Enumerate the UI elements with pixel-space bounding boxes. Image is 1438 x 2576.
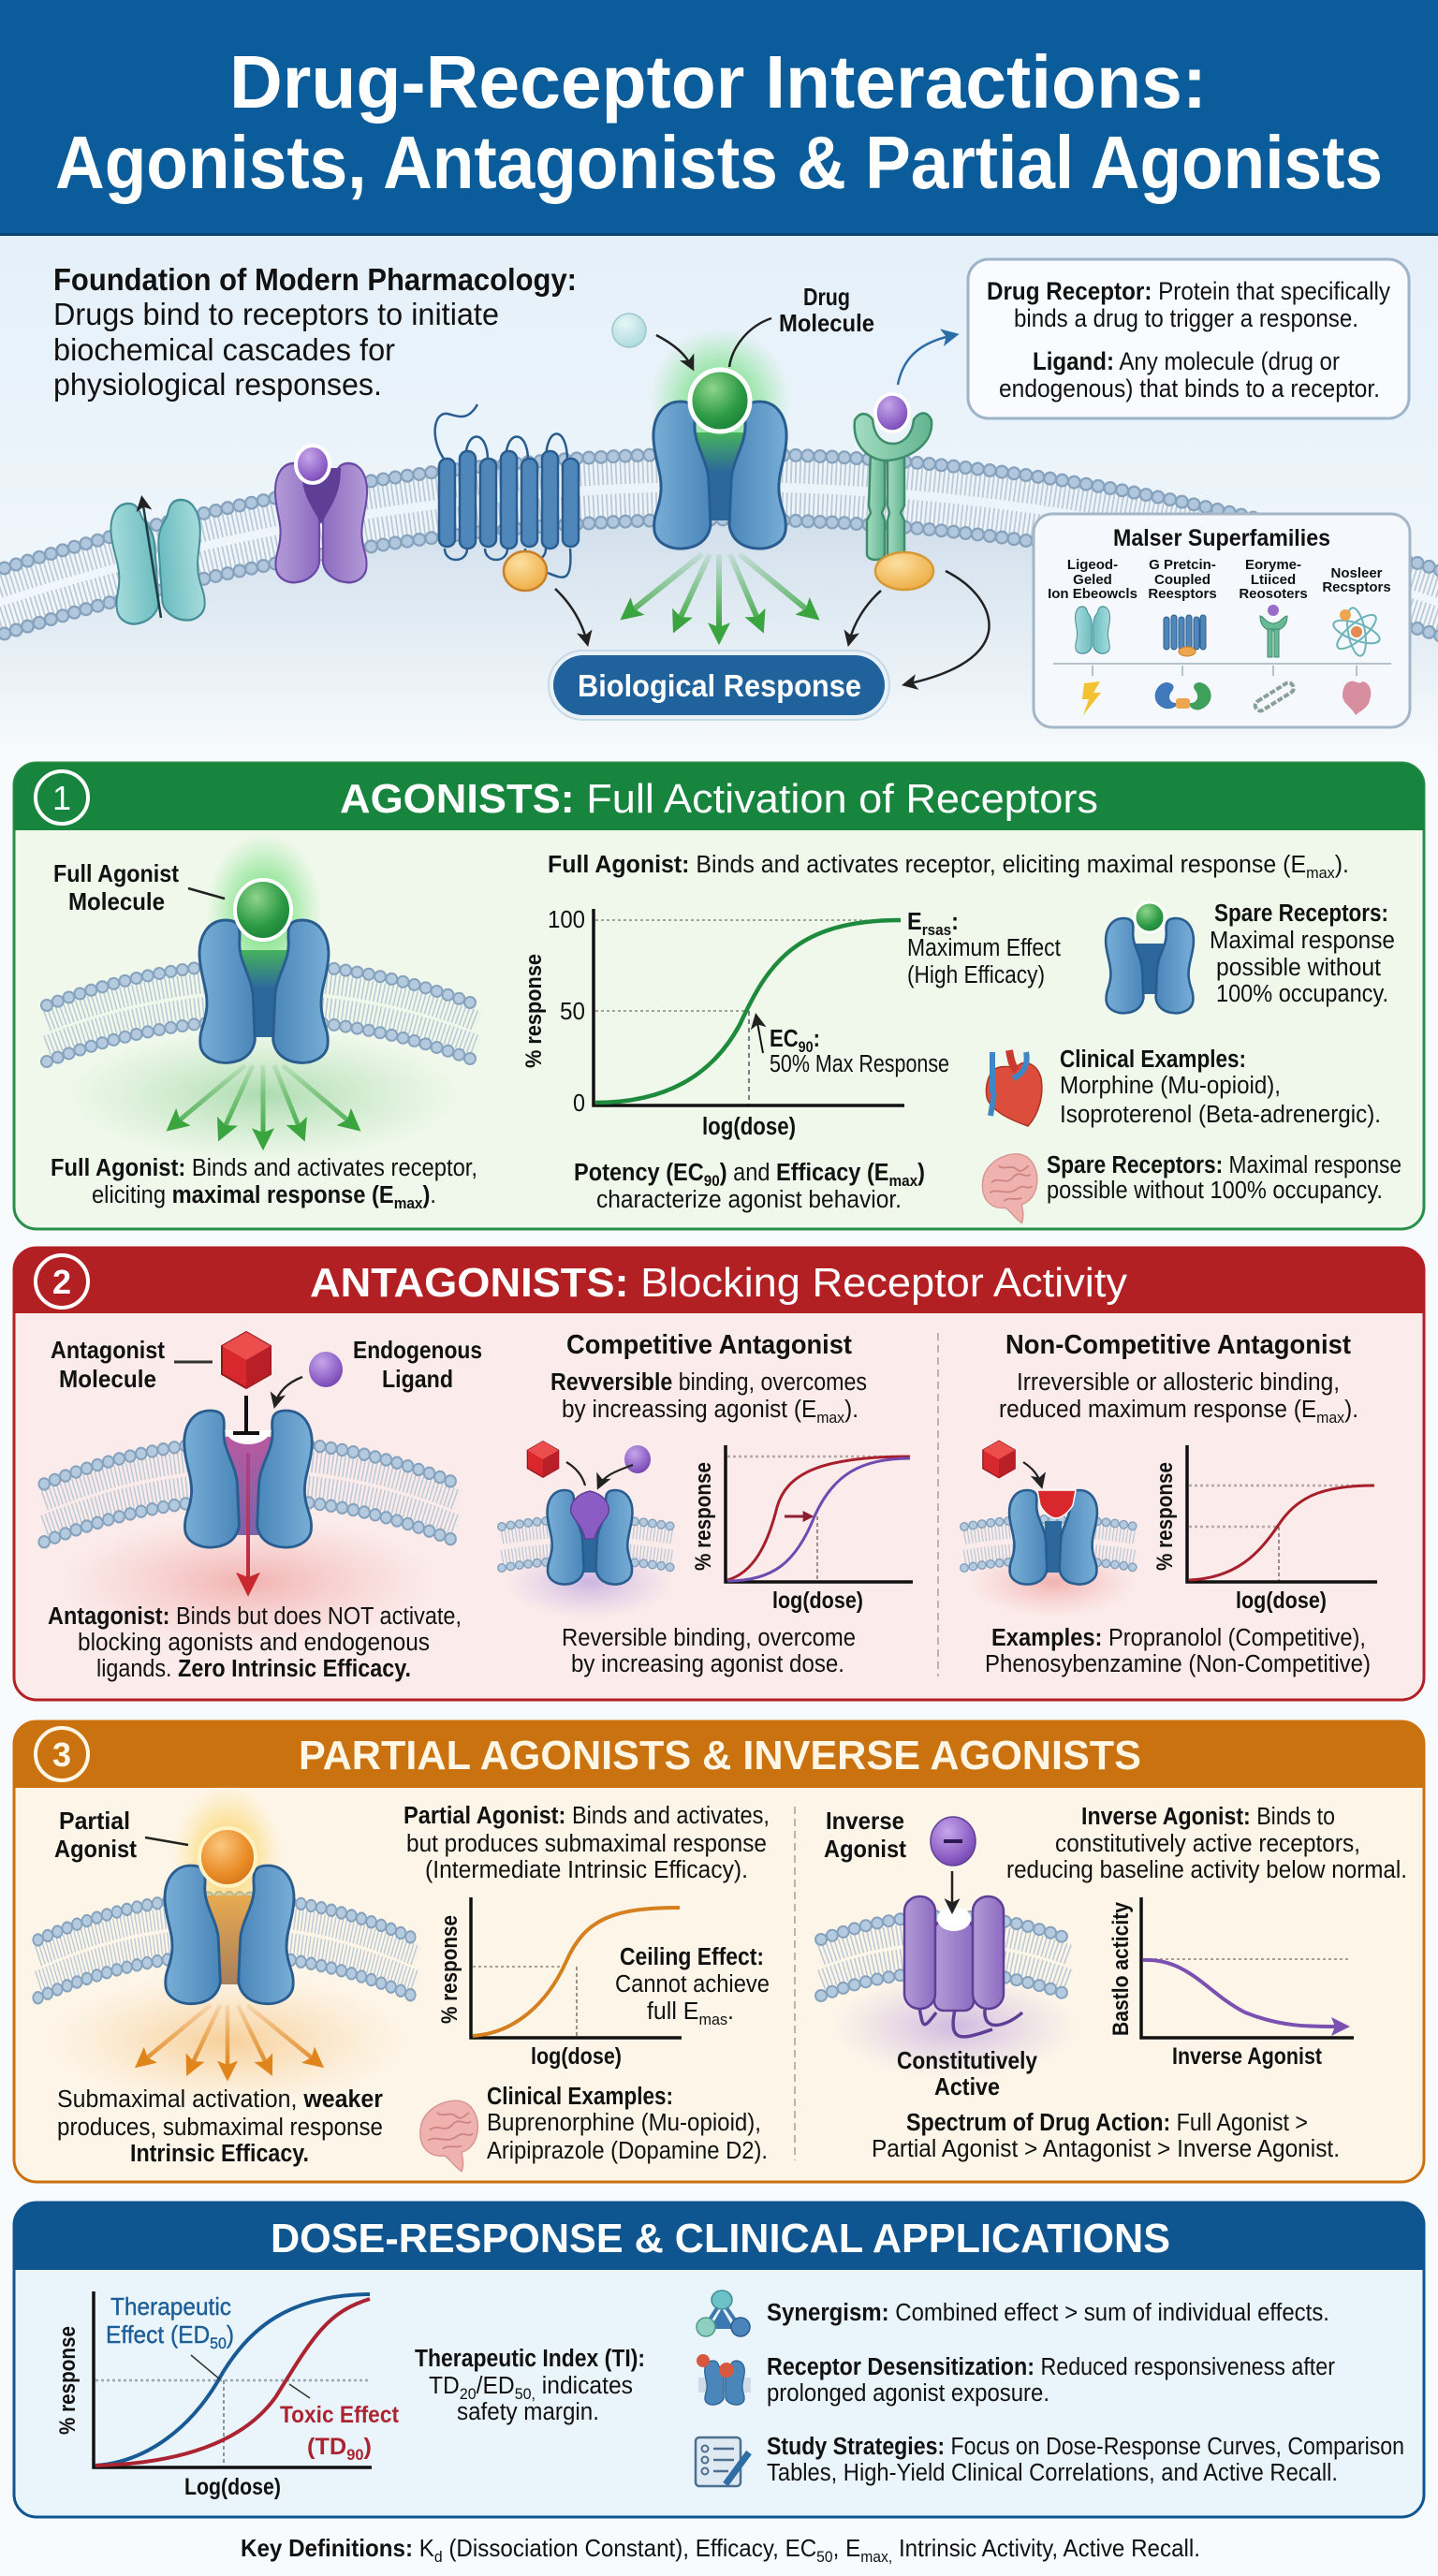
icon: receptor desensitization <box>697 2354 751 2405</box>
text: antagonist caption: blocking agonists and endogenous <box>78 1630 430 1656</box>
chart: agonist dose-response curve: % response <box>521 954 547 1068</box>
text: spare receptors: Spare Receptors: <box>1214 900 1388 927</box>
label: endogenous ligand: Ligand <box>382 1365 453 1393</box>
text: competitive antagonist heading: Revversible binding, overcomes <box>550 1369 867 1396</box>
text: ceiling effect: . <box>727 1998 734 2025</box>
icon: heart <box>987 1050 1042 1126</box>
chart: partial agonist curve: log(dose) <box>531 2043 622 2070</box>
label: therapeutic effect: 50 <box>210 2334 227 2352</box>
wiggly tails <box>919 2008 1022 2037</box>
column labels: Ltiiced <box>1251 572 1296 588</box>
label: therapeutic effect: ) <box>227 2320 234 2349</box>
callout: major superfamilies <box>1034 514 1410 727</box>
chart: agonist dose-response curve: 100 <box>548 907 585 933</box>
arrow: blocked signal <box>246 1453 250 1589</box>
footer: key definitions: 50 <box>816 2548 833 2566</box>
chart annotation: EC50: : <box>814 1026 820 1052</box>
text: therapeutic index: 20 <box>460 2385 477 2403</box>
callout: biological response <box>549 651 889 720</box>
label: partial agonist: Agonist <box>54 1835 137 1863</box>
panel: dose-response and clinical applications <box>14 2203 1424 2517</box>
icon: nuclear receptor atom <box>1330 607 1383 657</box>
text: full agonist caption: Full Agonist: Binds and activates receptor, <box>51 1155 477 1181</box>
icon: yellow kinase domain <box>875 552 933 590</box>
icon: spare receptor <box>1106 902 1194 1013</box>
text: submaximal activation: produces, submaximal response <box>57 2115 383 2141</box>
panel: antagonists <box>14 1248 1424 1700</box>
text: competitive antagonist heading: max <box>816 1409 845 1427</box>
chart: agonist dose-response curve <box>521 907 1061 1140</box>
text: partial agonist definition: Partial Agonist: Binds and activates, <box>404 1803 770 1829</box>
panel: partial and inverse agonists <box>14 1721 1424 2182</box>
icon: synergism <box>697 2291 750 2336</box>
text: antagonist examples <box>985 1625 1371 1677</box>
text: potency and efficacy <box>574 1160 925 1213</box>
label: constitutively active: Active <box>934 2072 1000 2100</box>
label: toxic effect <box>280 2402 400 2464</box>
chart annotation: EC50 <box>770 1026 949 1077</box>
text: submaximal activation: Intrinsic Efficacy. <box>130 2141 309 2167</box>
text: antagonist caption: Antagonist: Binds but does NOT activate, <box>48 1603 462 1630</box>
membrane: main lipid bilayer arc <box>0 454 1438 641</box>
text: inverse agonist definition: Inverse Agonist: Binds to <box>1081 1804 1335 1830</box>
text: non-competitive antagonist heading: reduced maximum response (E <box>999 1397 1330 1423</box>
text: non-competitive antagonist heading <box>999 1330 1358 1427</box>
chart annotation: Emax: rsas <box>922 921 951 939</box>
icon: teal ion channel <box>110 499 206 625</box>
text: full agonist caption: . <box>430 1182 437 1208</box>
text: therapeutic index <box>415 2346 645 2425</box>
column labels: Reesptors <box>1148 586 1217 602</box>
column labels: Reosoters <box>1239 586 1308 602</box>
text: study strategies <box>767 2434 1404 2486</box>
chart: competitive antagonist curves: log(dose) <box>772 1588 863 1614</box>
callout: drug receptor and ligand definitions: Ligand: Any molecule (drug or <box>1033 347 1340 375</box>
icon: purple ligand on enzyme-linked receptor <box>875 394 909 432</box>
label: antagonist molecule: Antagonist <box>51 1336 165 1364</box>
heading band: antagonists: ANTAGONISTS: Blocking Receptor Activity <box>310 1260 1127 1306</box>
chart: partial agonist curve: % response <box>437 1915 462 2024</box>
chart: inverse agonist curve: Inverse Agonist <box>1172 2043 1323 2070</box>
text: ceiling effect: full E <box>647 1998 700 2025</box>
chart: non-competitive antagonist curve: % response <box>1152 1462 1178 1571</box>
icon: brain <box>982 1154 1037 1223</box>
text: spare receptors: 100% occupancy. <box>1216 981 1388 1007</box>
chart: non-competitive antagonist curve <box>1152 1445 1377 1614</box>
text: potency and efficacy: 90 <box>704 1172 720 1190</box>
arrow: molecule into receptor <box>656 335 692 367</box>
label: antagonist molecule: Molecule <box>59 1365 156 1393</box>
text: non-competitive antagonist heading: Non-Competitive Antagonist <box>1005 1330 1351 1360</box>
icon: purple receptor with ligand <box>275 446 367 582</box>
label: partial agonist <box>54 1807 188 1863</box>
text: spectrum of drug action: Partial Agonist > Antagonist > Inverse Agonist. <box>872 2136 1340 2162</box>
chart annotation: EC50: 90 <box>799 1038 814 1056</box>
arrows: to biological response <box>555 571 990 684</box>
illustration: full agonist at receptor <box>47 833 477 1161</box>
text: clinical examples: Morphine (Mu-opioid), <box>1060 1073 1281 1099</box>
chart: therapeutic and toxic curves <box>55 2291 400 2500</box>
text: antagonist caption: ligands. Zero Intrinsic Efficacy. <box>96 1656 411 1682</box>
text: ceiling effect <box>615 1944 770 2028</box>
heading band: antagonists <box>14 1248 1424 1313</box>
text: foundation of modern pharmacology: Foundation of Modern Pharmacology: <box>53 262 577 297</box>
label: toxic effect: (TD <box>307 2434 346 2460</box>
text: partial agonist definition: but produces submaximal response <box>406 1831 767 1857</box>
icon: antagonist cube <box>222 1332 271 1388</box>
text: ceiling effect: Ceiling Effect: <box>620 1944 764 1970</box>
column labels: Nosleer <box>1330 565 1383 581</box>
text: antagonist examples: Phenosybenzamine (Non-Competitive) <box>985 1651 1371 1677</box>
label: inverse agonist: Agonist <box>824 1835 906 1863</box>
text: study strategies: Study Strategies: Focus on Dose-Response Curves, Comparison <box>767 2434 1404 2460</box>
text: potency and efficacy: Potency (EC <box>574 1160 727 1190</box>
chart: agonist dose-response curve: 0 <box>573 1090 585 1117</box>
text: inverse agonist definition: reducing baseline activity below normal. <box>1006 1857 1407 1883</box>
label: toxic effect: 90 <box>346 2447 364 2464</box>
icon: G protein subunits <box>1155 682 1211 710</box>
column labels: Recsptors <box>1322 579 1391 595</box>
text: reversible binding: by increasing agonist dose. <box>571 1651 844 1677</box>
text: clinical examples: Isoproterenol (Beta-adrenergic). <box>1060 1102 1381 1128</box>
text: therapeutic index: /ED <box>477 2373 515 2399</box>
text: ceiling effect: Cannot achieve <box>615 1971 770 1998</box>
chart: therapeutic and toxic curves: % response <box>55 2326 81 2435</box>
text: partial agonist definition <box>404 1803 770 1883</box>
column labels: Coupled <box>1154 572 1211 588</box>
callout: drug receptor and ligand definitions: Drug Receptor: Protein that specifically <box>987 277 1391 305</box>
label: constitutively active: Constitutively <box>897 2046 1037 2074</box>
text: clinical examples <box>1060 1046 1381 1128</box>
text: full agonist caption: eliciting maximal response (E <box>92 1182 411 1208</box>
callout: drug receptor and ligand definitions: endogenous) that binds to a receptor. <box>999 374 1380 402</box>
text: potency and efficacy: ) <box>917 1160 925 1186</box>
text: clinical examples: Aripiprazole (Dopamine D2). <box>487 2138 768 2164</box>
text: spare receptors note: possible without 100% occupancy. <box>1047 1178 1383 1204</box>
text: competitive antagonist heading: by increassing agonist (E <box>562 1397 829 1423</box>
icon: pale drug molecule <box>612 314 646 347</box>
icon: kinase chain <box>1254 681 1296 712</box>
text: clinical examples: Clinical Examples: <box>487 2084 673 2110</box>
text: spare receptors: possible without <box>1216 955 1381 981</box>
text: spare receptors: Maximal response <box>1210 928 1395 954</box>
text: partial agonist definition: (Intermediate Intrinsic Efficacy). <box>425 1857 748 1883</box>
text: reversible binding: Reversible binding, overcome <box>562 1625 856 1651</box>
heading band: antagonists: 2 <box>52 1263 71 1301</box>
label: partial agonist: Partial <box>59 1807 130 1835</box>
panel: agonists <box>14 763 1424 1229</box>
text: spectrum of drug action <box>872 2110 1340 2162</box>
text: foundation of modern pharmacology: Drugs bind to receptors to initiate <box>53 297 499 331</box>
label: inverse agonist <box>824 1807 906 1863</box>
text: full agonist definition: ) <box>1335 852 1343 878</box>
text: clinical examples <box>487 2084 768 2164</box>
text: spare receptors note: Spare Receptors: Maximal response <box>1047 1152 1401 1178</box>
text: study strategies: Tables, High-Yield Clinical Correlations, and Active Recall. <box>767 2460 1338 2486</box>
column labels: Eoryme- <box>1245 557 1301 573</box>
text: potency and efficacy: characterize agonist behavior. <box>596 1187 902 1213</box>
chart: non-competitive antagonist curve: log(dose) <box>1236 1588 1327 1614</box>
text: therapeutic index: Therapeutic Index (TI): <box>415 2346 645 2372</box>
text: foundation of modern pharmacology: biochemical cascades for <box>53 332 395 367</box>
text: antagonist caption <box>48 1603 462 1682</box>
icon: brain <box>420 2100 477 2172</box>
icon: central drug receptor <box>649 328 791 549</box>
text: competitive antagonist heading: ) <box>844 1397 852 1423</box>
text: inverse agonist definition <box>1006 1804 1407 1883</box>
text: clinical examples: Buprenorphine (Mu-opioid), <box>487 2110 761 2136</box>
heading band: agonists: AGONISTS: Full Activation of Receptors <box>340 776 1098 822</box>
callout: drug receptor and ligand definitions: binds a drug to trigger a response. <box>1014 304 1358 332</box>
text: therapeutic index: indicates <box>536 2373 633 2399</box>
heading band: partial and inverse agonists <box>14 1721 1424 1788</box>
heading band: agonists <box>14 763 1424 830</box>
heading band: partial and inverse agonists: 3 <box>52 1735 71 1774</box>
footer: key definitions: d <box>434 2548 443 2566</box>
header band <box>0 0 1438 236</box>
text: full agonist definition: max <box>1306 864 1335 882</box>
text: potency and efficacy: and Efficacy (E <box>734 1160 898 1186</box>
text: antagonist examples: Examples: Propranolol (Competitive), <box>991 1625 1366 1651</box>
icon: lightning bolt <box>1082 681 1101 715</box>
text: spectrum of drug action: Spectrum of Drug Action: Full Agonist > <box>906 2110 1308 2136</box>
text: receptor desensitization: prolonged agonist exposure. <box>767 2380 1049 2407</box>
text: foundation of modern pharmacology <box>53 262 577 402</box>
chart annotation: Emax: Maximum Effect <box>907 935 1061 961</box>
label: full agonist molecule: Molecule <box>68 887 165 915</box>
arrow: blue curve to definition box <box>898 335 954 385</box>
column labels: Ion Ebeowcls <box>1048 586 1137 602</box>
footer: key definitions: , E <box>833 2534 860 2562</box>
chart: agonist dose-response curve: log(dose) <box>702 1114 796 1140</box>
chart annotation: Emax: E <box>907 909 923 935</box>
label: drug molecule: Molecule <box>779 309 874 337</box>
label: inverse agonist: Inverse <box>826 1807 904 1835</box>
column labels: G Pretcin- <box>1149 557 1216 573</box>
heading band: partial and inverse agonists: PARTIAL AGONISTS & INVERSE AGONISTS <box>299 1733 1141 1778</box>
icon: orange G protein <box>504 551 547 591</box>
column labels: Geled <box>1073 572 1112 588</box>
title: Drug-Receptor Interactions: <box>229 40 1207 124</box>
chart: competitive antagonist curves: % response <box>691 1462 716 1571</box>
text: potency and efficacy: max <box>889 1172 918 1190</box>
text: submaximal activation: Submaximal activation, weaker <box>57 2086 383 2113</box>
label: full agonist molecule <box>53 859 225 915</box>
chart: therapeutic and toxic curves: Log(dose) <box>184 2474 281 2500</box>
divider <box>1053 664 1391 676</box>
text: full agonist caption: ) <box>423 1182 430 1208</box>
column labels <box>1048 557 1391 602</box>
text: ceiling effect: mas <box>698 2011 727 2028</box>
heading band: dose-response <box>14 2203 1424 2270</box>
text: competitive antagonist heading <box>550 1330 867 1427</box>
footer: key definitions: max, <box>860 2548 892 2566</box>
icon: T-bar inhibition <box>233 1396 259 1433</box>
text: non-competitive antagonist heading: Irreversible or allosteric binding, <box>1017 1369 1340 1396</box>
text: receptor desensitization: Receptor Desensitization: Reduced responsiveness after <box>767 2354 1335 2380</box>
chart annotation: EC50: EC <box>770 1026 802 1052</box>
footer: key definitions: Intrinsic Activity, Active Recall. <box>892 2534 1200 2562</box>
text: therapeutic index: safety margin. <box>457 2399 599 2425</box>
callout: biological response: Biological Response <box>578 668 861 703</box>
text: competitive antagonist heading: Competitive Antagonist <box>566 1330 852 1360</box>
divider <box>794 1807 796 2160</box>
icon: small ion channel <box>1076 607 1109 653</box>
text: full agonist definition: Full Agonist: Binds and activates receptor, eliciting maximal response (E <box>548 852 1320 878</box>
label: antagonist molecule <box>51 1336 213 1393</box>
text: potency and efficacy: ) <box>720 1160 727 1186</box>
heading band: agonists: 1 <box>52 779 71 817</box>
icon: GPCR seven-helix receptor <box>435 404 579 578</box>
label: toxic effect: ) <box>364 2434 372 2460</box>
footer: key definitions: (Dissociation Constant), Efficacy, EC <box>443 2534 816 2562</box>
label: therapeutic effect: Therapeutic <box>110 2292 231 2320</box>
chart: inverse agonist curve: Bastlo acticity <box>1108 1901 1134 2036</box>
label: endogenous ligand: Endogenous <box>353 1336 482 1364</box>
arrows: activation fan <box>171 1065 356 1144</box>
label: drug molecule <box>729 283 874 367</box>
illustration: inverse agonist at constitutively active receptor <box>821 1817 1077 2078</box>
text: full agonist definition: . <box>1343 852 1349 878</box>
text: foundation of modern pharmacology: physiological responses. <box>53 367 382 402</box>
label: constitutively active <box>897 2046 1037 2100</box>
chart: agonist dose-response curve: 50 <box>560 999 585 1025</box>
chart: partial agonist curve <box>437 1897 682 2070</box>
text: spare receptors note <box>1047 1152 1401 1204</box>
text: competitive antagonist heading: . <box>852 1397 858 1423</box>
text: receptor desensitization <box>767 2354 1335 2407</box>
text: spare receptors <box>1210 900 1395 1007</box>
text: inverse agonist definition: constitutively active receptors, <box>1055 1831 1360 1857</box>
title <box>55 40 1383 204</box>
text: reversible binding <box>562 1625 856 1677</box>
arrows: green activation fan <box>625 554 814 638</box>
text: therapeutic index: 50, <box>515 2385 536 2403</box>
icon: endogenous ligand <box>309 1352 343 1387</box>
label: drug molecule: Drug <box>803 283 850 311</box>
label: toxic effect: Toxic Effect <box>280 2402 400 2428</box>
icon: gene blob <box>1343 681 1371 715</box>
icon: study checklist <box>696 2437 749 2486</box>
chart: competitive antagonist curves <box>691 1445 913 1614</box>
text: non-competitive antagonist heading: max <box>1316 1409 1345 1427</box>
illustration: antagonist blocking receptor <box>44 1377 458 1647</box>
panel: intro foundation <box>0 236 1438 756</box>
label: therapeutic effect <box>106 2292 234 2352</box>
chart annotation: Emax: (High Efficacy) <box>907 962 1045 988</box>
label: endogenous ligand <box>353 1336 482 1393</box>
chart annotation: Emax: : <box>951 909 959 935</box>
chart annotation: Emax <box>907 909 1061 988</box>
callout: drug receptor and ligand definitions <box>968 259 1409 418</box>
illustration: partial agonist at receptor <box>38 1783 417 2106</box>
label: full agonist molecule: Full Agonist <box>53 859 179 887</box>
text: synergism: Synergism: Combined effect > sum of individual effects. <box>767 2300 1329 2326</box>
text: submaximal activation <box>57 2086 383 2167</box>
text: non-competitive antagonist heading: . <box>1352 1397 1358 1423</box>
text: full agonist caption <box>51 1155 477 1212</box>
callout: major superfamilies: Malser Superfamilies <box>1113 525 1330 551</box>
text: non-competitive antagonist heading: ) <box>1344 1397 1352 1423</box>
illustration: competitive binding <box>502 1442 674 1619</box>
illustration: non-competitive binding <box>964 1441 1137 1617</box>
text: therapeutic index: TD <box>429 2373 461 2399</box>
divider <box>937 1333 939 1676</box>
chart annotation: EC50: 50% Max Response <box>770 1051 949 1077</box>
footer: key definitions: Key Definitions: K <box>241 2534 436 2562</box>
icon: enzyme-linked receptor <box>855 413 932 560</box>
heading band: dose-response: DOSE-RESPONSE & CLINICAL APPLICATIONS <box>271 2216 1170 2261</box>
icon: small GPCR <box>1164 615 1206 656</box>
arrows: submaximal fan <box>139 2005 319 2075</box>
text: clinical examples: Clinical Examples: <box>1060 1046 1246 1073</box>
chart: inverse agonist curve <box>1108 1897 1354 2070</box>
text: full agonist caption: max <box>394 1194 423 1212</box>
icon: small enzyme receptor <box>1260 605 1287 657</box>
label: therapeutic effect: Effect (ED <box>106 2320 216 2349</box>
column labels: Ligeod- <box>1067 557 1118 573</box>
